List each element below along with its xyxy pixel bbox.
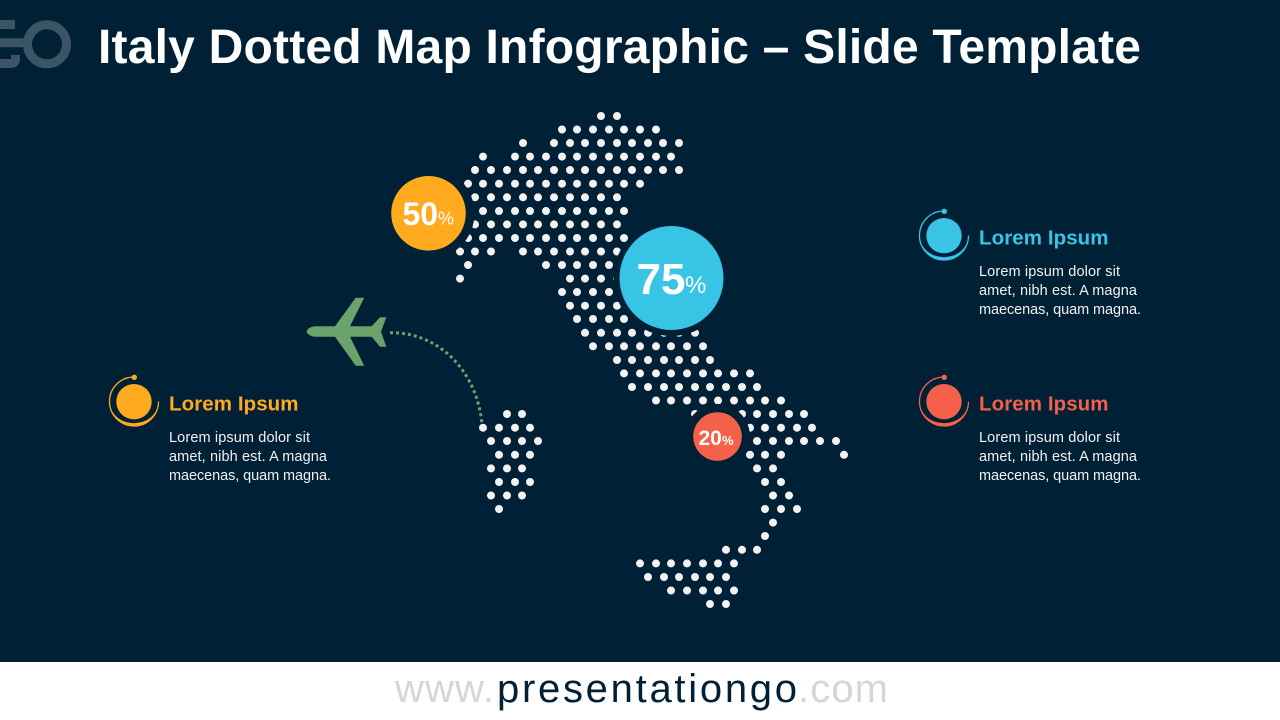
- text block: red item: [979, 430, 1141, 484]
- central Italy dots: [562, 292, 781, 400]
- text block: blue item: amet, nibh est. A magna: [979, 283, 1138, 299]
- text block: yellow item: maecenas, quam magna.: [169, 468, 331, 484]
- icon: yellow orbit circle: [109, 375, 158, 426]
- text block: red item: maecenas, quam magna.: [979, 468, 1141, 484]
- title: Italy Dotted Map Infographic – Slide Template: [98, 21, 1141, 74]
- icon: airplane: [307, 298, 386, 366]
- footer url: .com: [798, 667, 888, 711]
- text block: blue item: maecenas, quam magna.: [979, 302, 1141, 318]
- legend: red item: [920, 375, 1141, 484]
- northern Italy dots: [460, 116, 679, 279]
- bubble: 50%: [382, 167, 474, 259]
- bubble: 75%: 75: [636, 255, 685, 304]
- footer url: [394, 667, 888, 711]
- heading: blue item: Lorem Ipsum: [979, 226, 1108, 250]
- icon: red orbit circle: [920, 375, 968, 426]
- bubble: 20%: 20: [698, 427, 722, 450]
- Sardinia dots: [483, 414, 538, 509]
- heading: yellow item: Lorem Ipsum: [169, 392, 298, 416]
- heading: red item: Lorem Ipsum: [979, 392, 1108, 416]
- text block: yellow item: amet, nibh est. A magna: [169, 449, 328, 465]
- southern Italy dots: [695, 414, 844, 550]
- text block: red item: amet, nibh est. A magna: [979, 449, 1138, 465]
- legend: blue item: [920, 209, 1141, 318]
- footer band: [0, 662, 1280, 720]
- bubble: 50%: %: [438, 208, 454, 228]
- bubble: 20%: [685, 404, 750, 469]
- dotted map of Italy: [460, 116, 844, 604]
- text block: yellow item: Lorem ipsum dolor sit: [169, 430, 310, 446]
- bubble: 75%: [614, 220, 730, 336]
- footer url: www.: [394, 667, 494, 711]
- footer url: presentationgo: [497, 667, 797, 711]
- bubble: 75%: %: [685, 272, 706, 299]
- text block: blue item: [979, 264, 1141, 318]
- Sicily dots: [640, 563, 734, 604]
- arrow: dotted flight path: [390, 333, 482, 425]
- text block: red item: Lorem ipsum dolor sit: [979, 430, 1120, 446]
- icon: blue orbit circle: [920, 209, 968, 260]
- bubble: 20%: %: [722, 433, 734, 448]
- bubble: 50%: 50: [402, 196, 438, 232]
- text block: yellow item: [169, 430, 331, 484]
- watermark logo: cropped GO mark: [0, 24, 66, 64]
- legend: yellow item: [109, 375, 331, 484]
- text block: blue item: Lorem ipsum dolor sit: [979, 264, 1120, 280]
